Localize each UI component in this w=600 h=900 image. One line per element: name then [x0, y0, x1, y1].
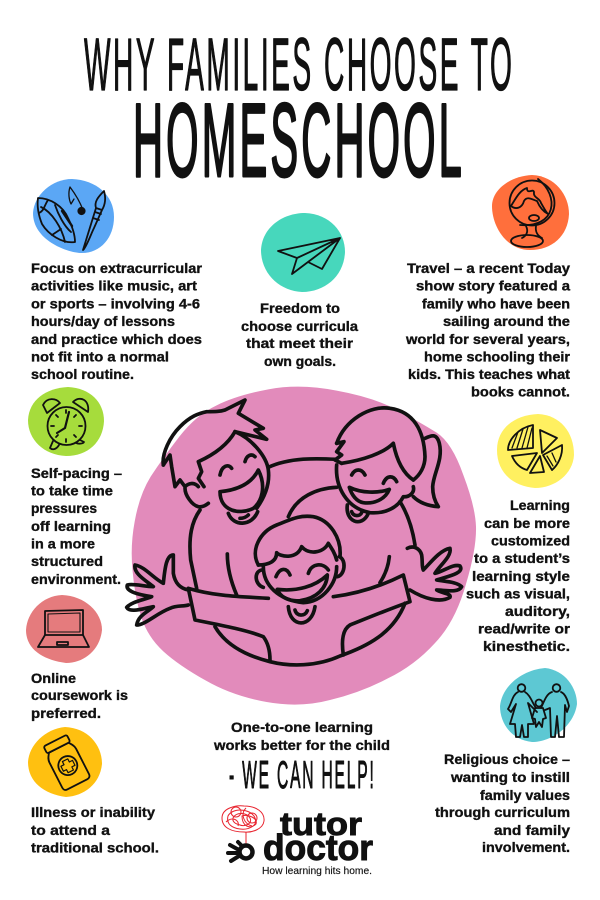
illustration: family hugging on pink blob	[127, 387, 476, 705]
text: extracurricular: and practice which does	[31, 332, 202, 347]
icon: football, music note and paintbrush	[33, 179, 114, 253]
icon: medicine bottle	[28, 727, 102, 797]
text: customized learning: to a student’s	[474, 551, 570, 566]
text: customized learning: learning style	[472, 569, 571, 584]
icon: family silhouette	[500, 668, 577, 742]
icon: paper plane	[261, 213, 345, 292]
text: freedom: that meet their	[246, 336, 354, 351]
text: one-to-one learning: One-to-one learning	[231, 720, 373, 735]
panel: customized learning	[466, 414, 574, 654]
text: travel: sailing around the	[443, 314, 571, 329]
text: travel: Travel – a recent Today	[407, 261, 571, 276]
panel: religious choice	[435, 668, 577, 855]
text: religious choice: wanting to instill	[450, 770, 570, 785]
text: one-to-one learning: works better for the child	[213, 738, 390, 753]
icon: laptop	[26, 595, 102, 663]
panel: illness	[28, 727, 159, 856]
text: freedom: own goals.	[264, 354, 336, 369]
text: online coursework: coursework is	[31, 688, 128, 703]
text: online coursework: Online	[31, 671, 77, 686]
text: extracurricular: or sports – involving 4-6	[31, 296, 201, 311]
text: customized learning: read/write or	[478, 622, 571, 636]
text: religious choice: involvement.	[482, 840, 570, 855]
text: self-pacing	[31, 466, 123, 587]
icon: pie chart	[497, 414, 574, 488]
text: travel: home schooling their	[424, 350, 571, 364]
text: religious choice	[435, 752, 571, 855]
text: travel: kids. This teaches what	[408, 367, 571, 382]
text: extracurricular: school routine.	[31, 367, 134, 382]
callout: we can help: - WE CAN HELP!	[229, 754, 374, 797]
text: religious choice: and family	[494, 823, 571, 838]
icon: red scribble brain	[222, 806, 264, 845]
text: customized learning: can be more	[484, 516, 571, 531]
text: self-pacing: pressures	[31, 501, 97, 516]
text: travel	[405, 261, 571, 400]
text: illness: Illness or inability	[31, 805, 156, 820]
text: self-pacing: Self-pacing –	[31, 466, 123, 481]
logo: tutor doctor	[222, 806, 373, 877]
logo: tutor doctor: doctor	[263, 827, 373, 868]
title	[84, 23, 512, 198]
text: customized learning: Learning	[510, 498, 570, 513]
text: travel: family who have been	[422, 296, 570, 311]
text: religious choice: through curriculum	[435, 805, 570, 820]
text: customized learning: such as visual,	[466, 586, 570, 602]
text: customized learning: auditory,	[505, 604, 570, 619]
text: extracurricular: Focus on extracurricular	[31, 261, 203, 276]
text: extracurricular: hours/day of lessons	[31, 314, 175, 329]
text: online coursework: preferred.	[31, 706, 101, 721]
panel: travel	[405, 175, 571, 400]
icon: black hand	[228, 842, 252, 861]
text: travel: show story featured a	[416, 279, 571, 294]
text: self-pacing: in a more	[31, 536, 96, 552]
text: travel: books cannot.	[471, 384, 570, 400]
panel: freedom to choose curricula	[241, 213, 359, 369]
text: illness: to attend a	[31, 823, 111, 838]
text: self-pacing: environment.	[31, 572, 121, 587]
text: extracurricular	[31, 261, 203, 382]
text: customized learning	[466, 498, 571, 654]
text: religious choice: Religious choice –	[444, 752, 571, 767]
text: religious choice: family values	[480, 788, 570, 803]
title: WHY FAMILIES CHOOSE TO	[84, 23, 512, 106]
panel: online coursework	[26, 595, 128, 721]
icon: globe	[492, 175, 569, 250]
text: freedom: Freedom to	[260, 301, 340, 316]
title: HOMESCHOOL	[133, 81, 462, 198]
text: self-pacing: off learning	[31, 519, 111, 534]
logo: tutor doctor: tutor	[280, 806, 362, 842]
text: customized learning: kinesthetic.	[483, 639, 570, 654]
text: extracurricular: activities like music, art	[31, 279, 198, 294]
text: freedom	[241, 301, 359, 369]
text: extracurricular: not fit into a normal	[31, 350, 169, 364]
text: self-pacing: to take time	[31, 484, 114, 498]
text: customized learning: customized	[491, 534, 570, 548]
logo: tutor doctor: How learning hits home.	[262, 865, 372, 877]
panel: self-pacing	[28, 387, 123, 587]
text: illness	[31, 805, 159, 856]
text: illness: traditional school.	[31, 840, 159, 856]
text: one-to-one learning	[213, 720, 390, 753]
text: online coursework	[31, 671, 128, 721]
text: travel: world for several years,	[405, 332, 570, 347]
panel: extracurricular activities	[31, 179, 203, 382]
text: freedom: choose curricula	[241, 319, 359, 334]
text: self-pacing: structured	[31, 554, 103, 569]
icon: alarm clock	[28, 387, 104, 456]
